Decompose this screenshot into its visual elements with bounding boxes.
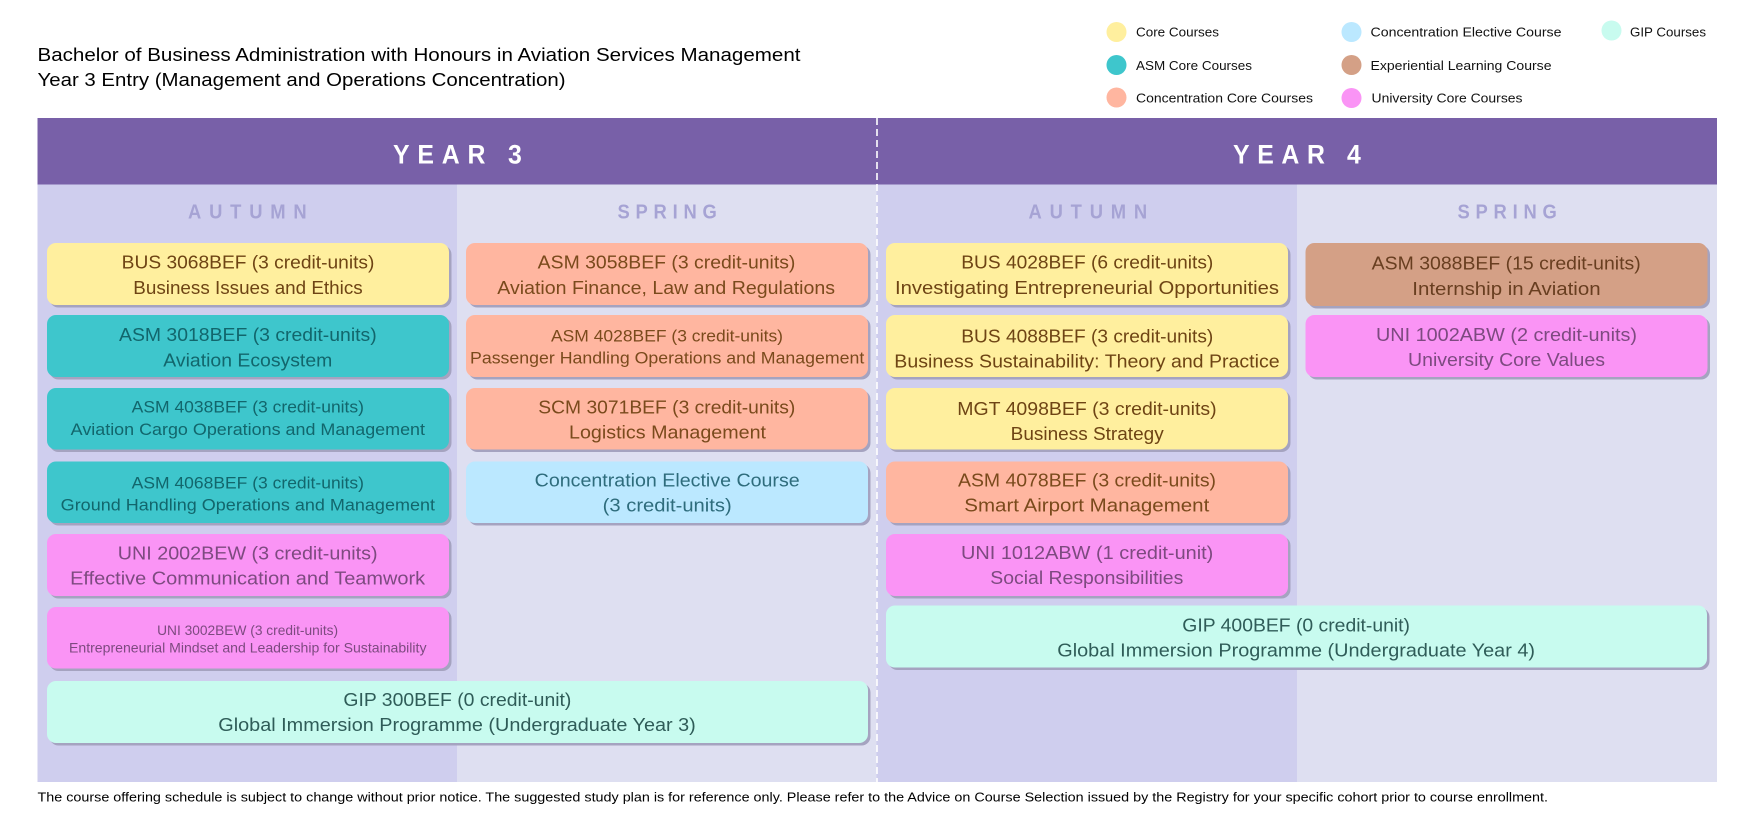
- course: MGT 4098BEF: Business Strategy: [1011, 424, 1164, 444]
- course: GIP 400BEF: [886, 606, 1710, 670]
- course: ASM 4078BEF: [886, 462, 1290, 526]
- legend item: experiential learning course: [1342, 55, 1552, 75]
- course: BUS 3068BEF: BUS 3068BEF (3 credit-units): [122, 253, 374, 273]
- course: BUS 4028BEF: [886, 243, 1290, 308]
- course: UNI 2002BEW: Effective Communication and Teamwork: [70, 568, 426, 588]
- course: ASM 4068BEF: [47, 462, 452, 526]
- course: ASM 4028BEF: [466, 315, 870, 380]
- panel: year 3 spring: SPRING: [618, 202, 717, 224]
- course: SCM 3071BEF: Logistics Management: [569, 422, 766, 442]
- panel: year 3 header: [38, 118, 876, 184]
- legend: [1106, 20, 1707, 108]
- panel: year 4 autumn: [876, 184, 1297, 782]
- course: ASM 3018BEF: ASM 3018BEF (3 credit-units): [119, 325, 377, 345]
- legend item: university core courses: [1342, 88, 1523, 108]
- title: Bachelor of Business Administration with Honours in Aviation Services Management: [38, 45, 801, 65]
- course: ASM 4068BEF: Ground Handling Operations and Management: [61, 496, 435, 514]
- course: ASM 3088BEF: [1306, 243, 1710, 308]
- course: ASM 3018BEF: [47, 315, 452, 380]
- panel: year 3 autumn: [38, 184, 457, 782]
- course: GIP 300BEF: Global Immersion Programme (Undergraduate Year 3): [218, 715, 696, 735]
- panel: year 4 spring: [1297, 184, 1717, 782]
- legend item: GIP courses: [1602, 20, 1707, 40]
- course: ASM 3058BEF: [466, 243, 870, 308]
- course: UNI 1012ABW: Social Responsibilities: [990, 568, 1183, 588]
- course: GIP 300BEF: GIP 300BEF (0 credit-unit): [343, 690, 571, 710]
- course: MGT 4098BEF: MGT 4098BEF (3 credit-units): [957, 399, 1217, 419]
- panel: year 4 spring: SPRING: [1458, 202, 1557, 224]
- course: GIP 400BEF: Global Immersion Programme (Undergraduate Year 4): [1057, 640, 1535, 660]
- course: BUS 4088BEF: BUS 4088BEF (3 credit-units): [961, 326, 1213, 346]
- title: Year 3 Entry (Management and Operations Concentration): [38, 70, 566, 90]
- course: concentration elective: Concentration Elective Course: [535, 471, 800, 491]
- course: ASM 4078BEF: Smart Airport Management: [964, 496, 1209, 516]
- course: UNI 1002ABW: UNI 1002ABW (2 credit-units): [1376, 325, 1637, 345]
- course: UNI 1002ABW: University Core Values: [1408, 350, 1605, 370]
- title: [38, 45, 801, 90]
- course: ASM 4038BEF: [47, 388, 452, 452]
- course: GIP 400BEF: GIP 400BEF (0 credit-unit): [1182, 616, 1410, 636]
- course: UNI 2002BEW: [47, 534, 452, 598]
- legend item: concentration elective course: Concentration Elective Course: [1370, 24, 1562, 40]
- course: concentration elective: [466, 462, 870, 526]
- footer note: The course offering schedule is subject to change without prior notice. The suggested study plan is for reference only. Please refer to the Advice on Course Selection issued by the Registry for your specific cohort prior to course enrollment.: [38, 790, 1548, 804]
- course: ASM 4028BEF: Passenger Handling Operations and Management: [470, 350, 865, 368]
- legend item: core courses: Core Courses: [1136, 24, 1220, 40]
- legend item: university core courses: University Core Courses: [1372, 90, 1523, 106]
- legend item: concentration elective course: [1342, 22, 1562, 42]
- course: ASM 3058BEF: ASM 3058BEF (3 credit-units): [538, 253, 795, 273]
- course: ASM 4078BEF: ASM 4078BEF (3 credit-units): [958, 471, 1216, 491]
- course: UNI 2002BEW: UNI 2002BEW (3 credit-units): [118, 543, 378, 563]
- course: UNI 3002BEW: UNI 3002BEW (3 credit-units): [157, 622, 338, 638]
- course: BUS 4028BEF: Investigating Entrepreneurial Opportunities: [895, 278, 1279, 298]
- legend item: concentration core courses: Concentration Core Courses: [1136, 90, 1314, 106]
- course: UNI 3002BEW: [47, 607, 452, 671]
- panel: year 3 header: YEAR 3: [393, 141, 522, 170]
- panel: year 4 header: [876, 118, 1717, 184]
- legend item: core courses: [1106, 22, 1220, 42]
- panel: year 3 autumn: AUTUMN: [188, 202, 307, 224]
- course: ASM 4028BEF: ASM 4028BEF (3 credit-units): [551, 328, 783, 346]
- course: UNI 1012ABW: [886, 534, 1290, 598]
- course: BUS 4028BEF: BUS 4028BEF (6 credit-units): [961, 253, 1213, 273]
- course: UNI 1012ABW: UNI 1012ABW (1 credit-unit): [961, 543, 1213, 563]
- course: BUS 3068BEF: Business Issues and Ethics: [133, 278, 363, 298]
- course: UNI 1002ABW: [1306, 315, 1710, 380]
- course: BUS 3068BEF: [47, 243, 452, 308]
- course: BUS 4088BEF: [886, 315, 1290, 380]
- legend item: experiential learning course: Experiential Learning Course: [1370, 58, 1552, 73]
- panel: year 4 autumn: AUTUMN: [1028, 202, 1147, 224]
- course: ASM 3088BEF: Internship in Aviation: [1412, 279, 1601, 299]
- course: GIP 300BEF: [47, 681, 870, 746]
- course: ASM 4038BEF: Aviation Cargo Operations and Management: [71, 421, 425, 439]
- legend item: ASM core courses: ASM Core Courses: [1136, 58, 1253, 73]
- course: BUS 4088BEF: Business Sustainability: Theory and Practice: [894, 352, 1280, 372]
- legend item: ASM core courses: [1106, 55, 1253, 75]
- course: ASM 3018BEF: Aviation Ecosystem: [163, 350, 332, 370]
- panel: year 4 header: YEAR 4: [1233, 141, 1361, 170]
- course: ASM 3088BEF: ASM 3088BEF (15 credit-units): [1372, 254, 1641, 274]
- course: UNI 3002BEW: Entrepreneurial Mindset and Leadership for Sustainability: [69, 640, 426, 656]
- course: concentration elective: (3 credit-units): [603, 496, 732, 516]
- course: SCM 3071BEF: [466, 388, 870, 452]
- course: SCM 3071BEF: SCM 3071BEF (3 credit-units): [538, 397, 795, 417]
- panel: year 3 spring: [457, 184, 876, 782]
- legend item: GIP courses: GIP Courses: [1630, 24, 1707, 40]
- course: ASM 4038BEF: ASM 4038BEF (3 credit-units): [132, 399, 364, 417]
- legend item: concentration core courses: [1106, 88, 1314, 108]
- course: MGT 4098BEF: [886, 388, 1290, 452]
- course: ASM 4068BEF: ASM 4068BEF (3 credit-units): [132, 474, 364, 492]
- course: ASM 3058BEF: Aviation Finance, Law and Regulations: [497, 278, 835, 298]
